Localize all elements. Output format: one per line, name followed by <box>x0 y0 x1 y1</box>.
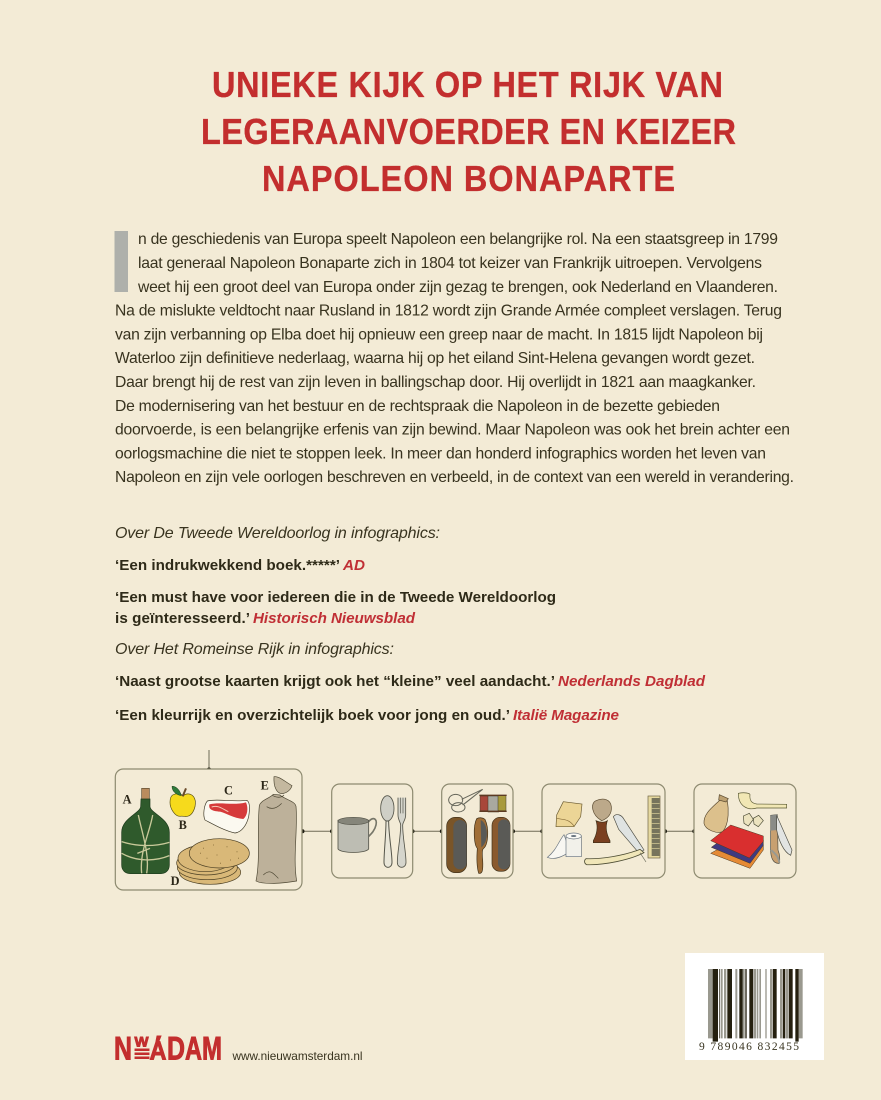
icon: soap <box>556 802 582 827</box>
publisher logo: A <box>150 1036 167 1066</box>
icon: fork <box>397 798 406 867</box>
label: E: E <box>261 779 269 793</box>
publisher logo: W <box>134 1034 149 1050</box>
reviews block: ‘Een indrukwekkend boek.*****’ <box>115 557 340 574</box>
icon: razor <box>585 815 646 865</box>
icon: round brush 2 <box>492 817 510 871</box>
reviews block: Over Het Romeinse Rijk in infographics: <box>115 641 394 658</box>
title <box>201 66 736 199</box>
icon: spoon <box>381 796 394 867</box>
publisher logo: N <box>114 1030 132 1066</box>
intro text block: Daar brengt hij de rest van zijn leven in ballingschap door. Hij overlijdt in 1821 aan maagkanker. <box>115 374 756 391</box>
icon: shaving brush <box>593 799 611 843</box>
equipment chain diagram <box>115 750 796 890</box>
intro text block: Waterloo zijn definitieve nederlaag, waarna hij op het eiland Sint-Helena gevangen wordt gezet. <box>115 350 755 367</box>
icon: apple <box>170 786 195 817</box>
icon: pouch <box>704 795 728 832</box>
reviews block: Historisch Nieuwsblad <box>253 610 416 627</box>
panel: mess kit <box>332 784 413 878</box>
title: LEGERAANVOERDER EN KEIZER <box>201 113 736 152</box>
reviews block: Nederlands Dagblad <box>558 673 706 690</box>
label: A: A <box>123 792 132 806</box>
title: NAPOLEON BONAPARTE <box>262 160 675 199</box>
intro text block: Napoleon en zijn vele oorlogen beschreven en verbeeld, in de context van een wereld in verandering. <box>115 469 794 486</box>
panel: toiletries <box>542 784 665 878</box>
barcode digits: 9 789046 832455 <box>699 1041 799 1053</box>
intro text block: doorvoerde, is een belangrijke erfenis van zijn bewind. Maar Napoleon was ook het brein achter een <box>115 422 790 438</box>
icon: green bottle <box>122 788 169 874</box>
icon: comb <box>648 796 660 858</box>
icon: dice <box>743 813 763 827</box>
reviews block: ‘Een kleurrijk en overzichtelijk boek voor jong en oud.’ <box>115 707 510 724</box>
label: B: B <box>179 818 187 832</box>
intro text block: Na de mislukte veldtocht naar Rusland in 1812 wordt zijn Grande Armée compleet verslagen. Terug <box>115 302 782 320</box>
publisher logo: A <box>185 1030 202 1066</box>
reviews block: ‘Een must have voor iedereen die in de Tweede Wereldoorlog <box>115 589 556 606</box>
intro text block: weet hij een groot deel van Europa onder zijn gezag te brengen, ook Nederland en Vlaanderen. <box>137 279 778 296</box>
intro text block: van zijn verbanning op Elba doet hij opnieuw een greep naar de macht. In 1815 lijdt Napoleon bij <box>115 326 763 344</box>
title: UNIEKE KIJK OP HET RIJK VAN <box>212 66 723 105</box>
intro text block: n de geschiedenis van Europa speelt Napoleon een belangrijke rol. Na een staatsgreep in 1799 <box>138 231 778 248</box>
icon: pocket knife <box>771 815 792 863</box>
publisher logo: M <box>202 1030 222 1066</box>
reviews block: Italië Magazine <box>513 707 620 724</box>
connectors <box>207 750 696 833</box>
label: C: C <box>224 784 233 798</box>
intro text block: De modernisering van het bestuur en de rechtspraak die Napoleon in de bezette gebieden <box>115 398 720 415</box>
barcode panel <box>685 953 824 1060</box>
reviews block: AD <box>342 557 365 574</box>
publisher logo: D <box>167 1030 185 1066</box>
icon: round brush <box>447 817 467 873</box>
icon: scissors <box>449 789 483 812</box>
reviews block <box>115 525 706 724</box>
icon: pipe <box>738 793 787 809</box>
publisher logo <box>114 1030 222 1066</box>
icon: stack of books <box>711 825 763 868</box>
icon: handled brush <box>474 818 488 873</box>
intro text block: oorlogsmachine die niet te stoppen leek. In meer dan honderd infographics worden het leven van <box>115 446 766 462</box>
icon: meat <box>204 800 249 833</box>
panel: rations <box>115 769 302 890</box>
reviews block: is geïnteresseerd.’ <box>115 610 250 627</box>
panel: sewing and brushes <box>442 784 513 878</box>
intro text block <box>115 231 794 486</box>
website url: www.nieuwamsterdam.nl <box>232 1049 362 1063</box>
reviews block: ‘Naast grootse kaarten krijgt ook het “kleine” veel aandacht.’ <box>115 673 555 690</box>
icon: mug <box>338 817 376 852</box>
barcode bars <box>708 969 803 1042</box>
panel: personal items <box>694 784 796 878</box>
icon: sack <box>256 777 297 883</box>
intro text block: laat generaal Napoleon Bonaparte zich in 1804 tot keizer van Frankrijk uitroepen. Vervolgens <box>138 255 762 272</box>
icon: thread spools <box>479 795 507 812</box>
icon: toilet paper roll <box>547 833 581 858</box>
reviews block: Over De Tweede Wereldoorlog in infographics: <box>115 525 440 542</box>
icon: biscuits <box>177 839 249 884</box>
drop cap block <box>114 231 128 292</box>
label: D: D <box>171 874 180 888</box>
